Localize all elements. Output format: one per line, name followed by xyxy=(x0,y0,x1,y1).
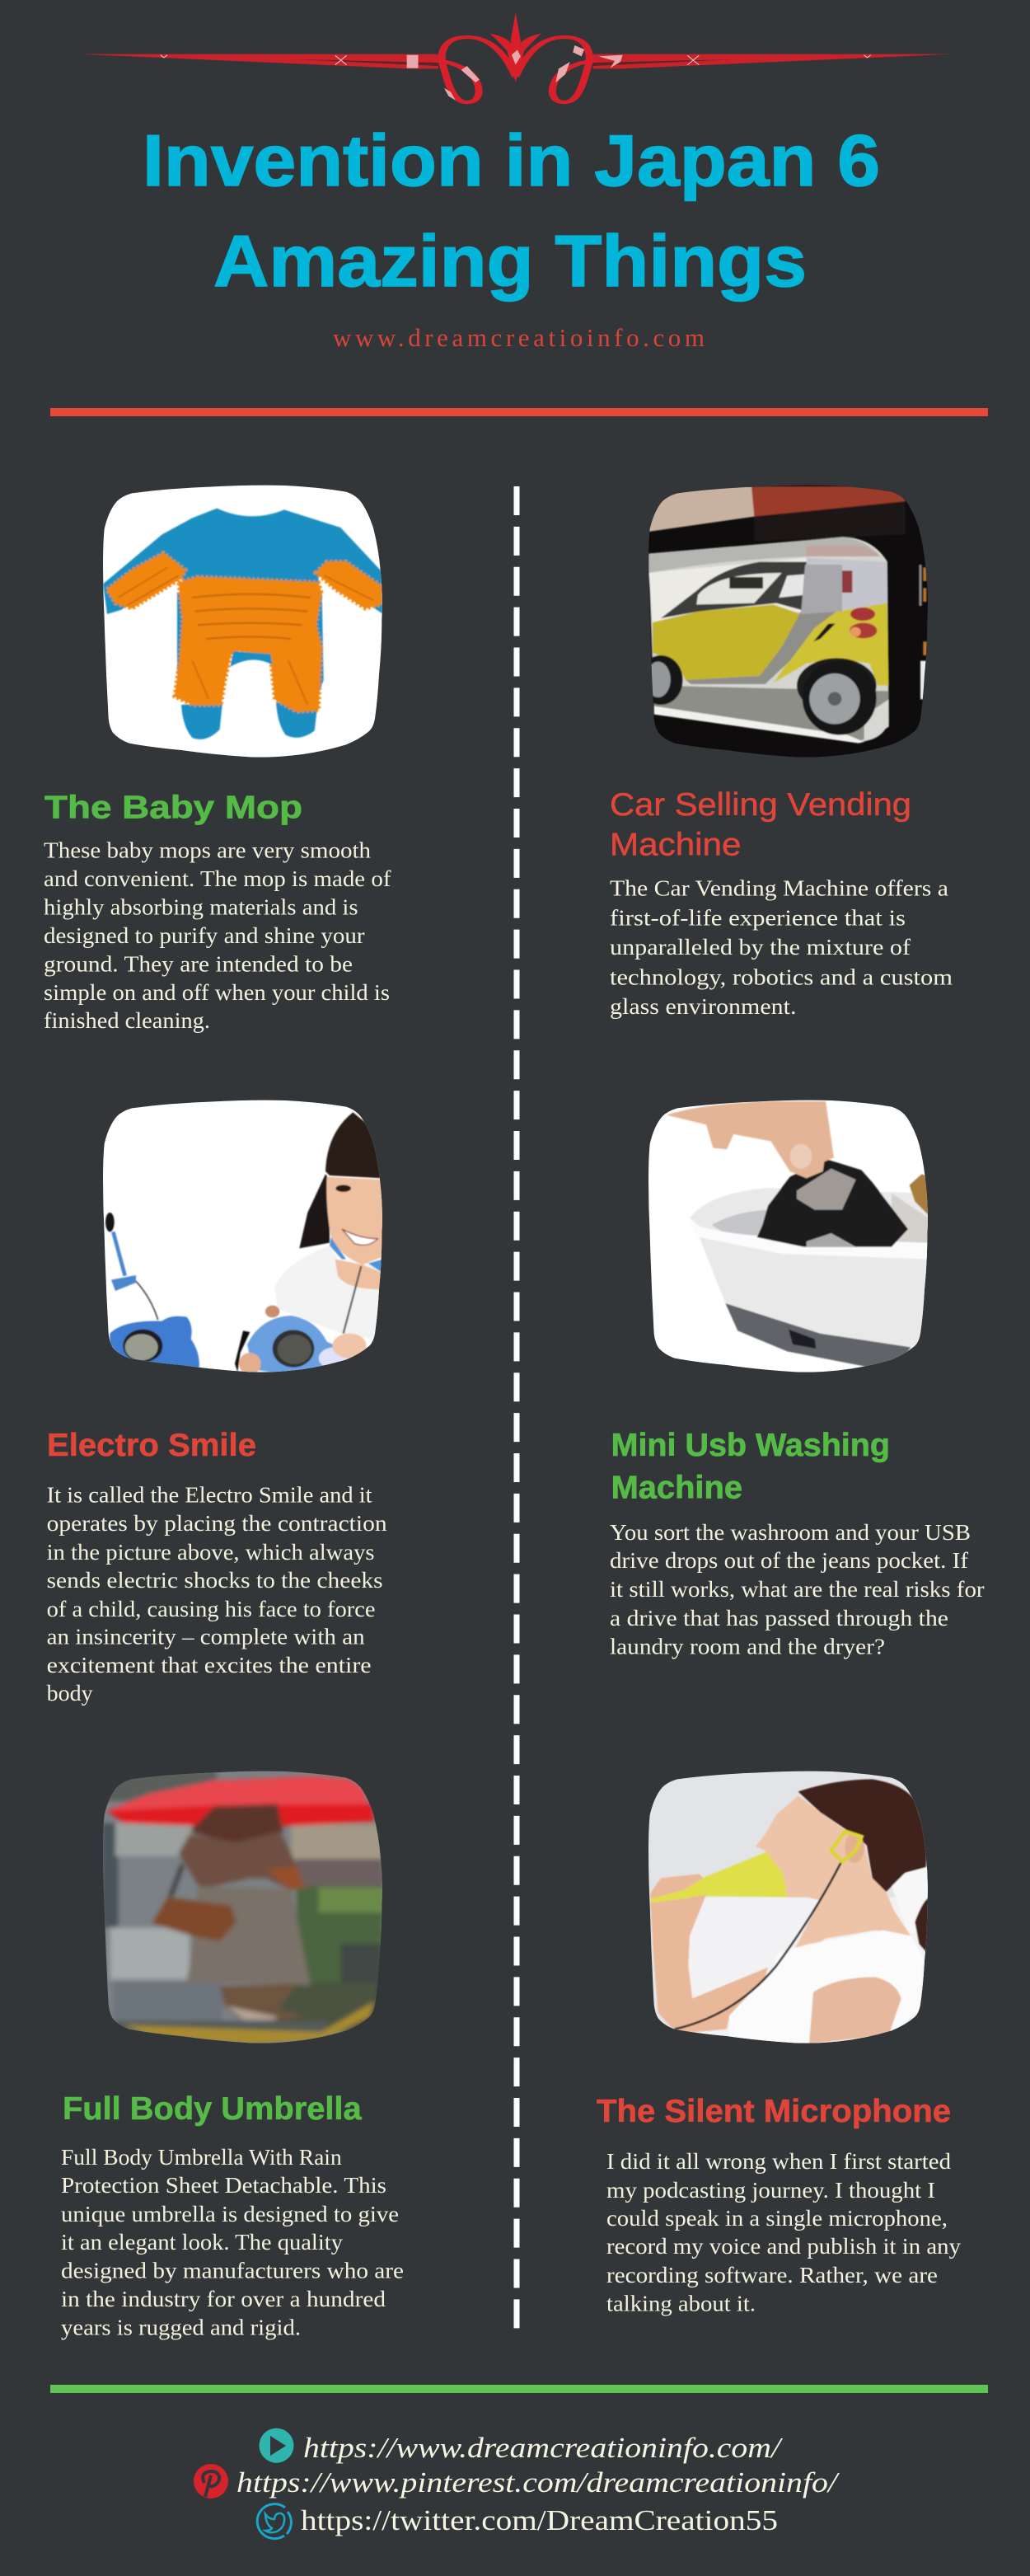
panel: car selling vending machine xyxy=(610,482,953,1019)
body text xyxy=(610,876,953,1019)
body text: highly absorbing materials and is xyxy=(44,895,358,920)
body text xyxy=(61,2145,404,2339)
icon: pinterest xyxy=(194,2464,228,2499)
photo: woman under full body umbrella xyxy=(99,1768,387,2048)
icon: twitter xyxy=(257,2504,291,2539)
body text: body xyxy=(47,1681,93,1706)
body text: ground. They are intended to be xyxy=(44,951,353,976)
website subtitle: www.dreamcreatioinfo.com xyxy=(333,323,705,352)
icon: play xyxy=(259,2428,293,2463)
body text xyxy=(44,838,391,1033)
panel: full body umbrella xyxy=(61,1768,404,2339)
body text: The Car Vending Machine offers a xyxy=(610,876,948,901)
body text: operates by placing the contraction xyxy=(47,1511,387,1536)
body text: and convenient. The mop is made of xyxy=(44,866,391,891)
title: Invention in Japan 6 xyxy=(143,120,880,201)
heading: The Baby Mop xyxy=(44,790,302,826)
heading xyxy=(611,1428,890,1505)
body text: You sort the washroom and your USB xyxy=(610,1520,971,1545)
pinterest link: https://www.pinterest.com/dreamcreationinfo/ xyxy=(236,2466,840,2499)
body text xyxy=(47,1482,387,1706)
ornament: red flourish xyxy=(80,12,951,102)
body text: designed to purify and shine your xyxy=(44,923,365,948)
photo: car vending machine xyxy=(639,482,933,762)
heading: Machine xyxy=(611,1471,742,1505)
body text: technology, robotics and a custom xyxy=(610,964,953,989)
body text: talking about it. xyxy=(606,2292,756,2316)
body text: recording software. Rather, we are xyxy=(606,2263,938,2287)
body text: excitement that excites the entire xyxy=(47,1653,372,1677)
body text: in the industry for over a hundred xyxy=(61,2287,386,2311)
title xyxy=(143,120,880,302)
panel: the silent microphone xyxy=(597,1768,962,2316)
body text: glass environment. xyxy=(610,994,796,1019)
body text: in the picture above, which always xyxy=(47,1540,375,1565)
heading: The Silent Microphone xyxy=(597,2094,951,2129)
body text: could speak in a single microphone, xyxy=(606,2206,948,2231)
body text: record my voice and publish it in any xyxy=(606,2234,962,2259)
body text: I did it all wrong when I first started xyxy=(606,2149,952,2174)
footer links xyxy=(194,2428,840,2539)
body text: These baby mops are very smooth xyxy=(44,838,372,863)
body text: Full Body Umbrella With Rain xyxy=(61,2145,342,2170)
photo: girl with electro smile device xyxy=(99,1097,387,1377)
body text: my podcasting journey. I thought I xyxy=(606,2178,935,2203)
body text: an insincerity – complete with an xyxy=(47,1625,365,1649)
body text: unique umbrella is designed to give xyxy=(61,2202,399,2226)
body text: sends electric shocks to the cheeks xyxy=(47,1568,383,1593)
photo: baby mop suit xyxy=(99,482,387,762)
body text xyxy=(606,2149,962,2316)
photo: woman with silent microphone xyxy=(644,1768,933,2048)
heading: Machine xyxy=(610,828,742,862)
heading: Car Selling Vending xyxy=(610,787,911,823)
dashed center divider xyxy=(514,486,519,2330)
body text: simple on and off when your child is xyxy=(44,980,390,1005)
body text: years is rugged and rigid. xyxy=(61,2315,301,2339)
body text xyxy=(610,1520,985,1659)
body text: It is called the Electro Smile and it xyxy=(47,1482,372,1507)
body text: Protection Sheet Detachable. This xyxy=(61,2173,386,2198)
body text: first-of-life experience that is xyxy=(610,905,906,930)
heading: Mini Usb Washing xyxy=(611,1428,890,1463)
body text: unparalleled by the mixture of xyxy=(610,935,911,960)
photo: mini washing bowl with watch xyxy=(644,1097,933,1377)
body text: it still works, what are the real risks for xyxy=(610,1577,985,1602)
body text: laundry room and the dryer? xyxy=(610,1634,885,1659)
heading xyxy=(610,787,911,862)
red divider bar xyxy=(50,408,988,416)
panel: mini usb washing machine xyxy=(610,1097,985,1659)
heading: Electro Smile xyxy=(47,1428,256,1463)
website link: https://www.dreamcreationinfo.com/ xyxy=(303,2432,784,2464)
title: Amazing Things xyxy=(213,220,807,302)
body text: it an elegant look. The quality xyxy=(61,2230,344,2255)
panel: the baby mop xyxy=(44,482,391,1033)
twitter link: https://twitter.com/DreamCreation55 xyxy=(301,2504,778,2536)
body text: a drive that has passed through the xyxy=(610,1606,948,1631)
body text: drive drops out of the jeans pocket. If xyxy=(610,1548,968,1573)
body text: of a child, causing his face to force xyxy=(47,1597,376,1621)
body text: designed by manufacturers who are xyxy=(61,2259,404,2283)
heading: Full Body Umbrella xyxy=(63,2091,362,2127)
panel: electro smile xyxy=(47,1097,387,1706)
green divider bar xyxy=(50,2385,988,2393)
body text: finished cleaning. xyxy=(44,1008,210,1033)
